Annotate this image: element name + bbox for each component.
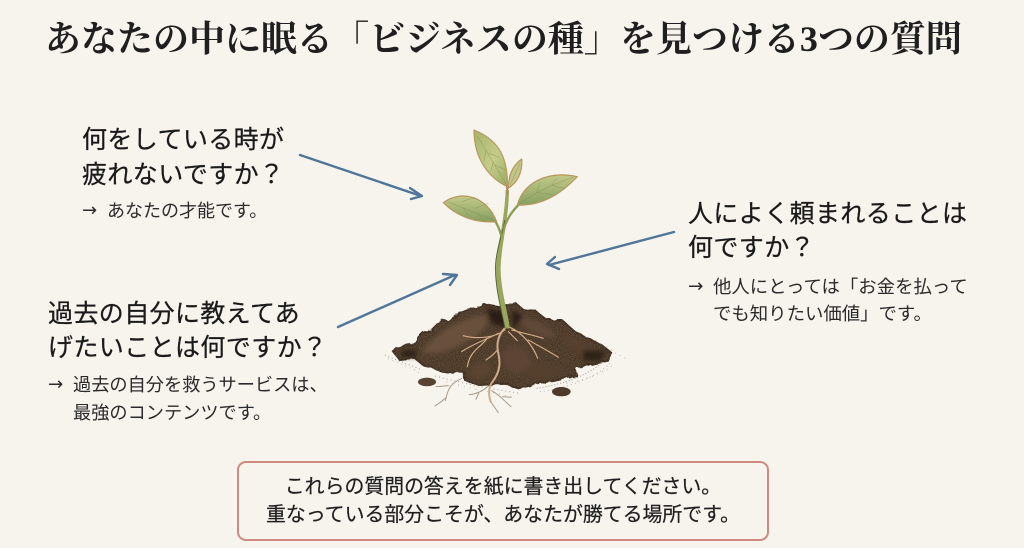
stem	[494, 183, 519, 328]
roots	[435, 327, 558, 413]
question 1 heading: 疲れないですか？	[82, 160, 284, 188]
callout box: これらの質問の答えを紙に書き出してください。	[285, 476, 721, 498]
arrow: right question to plant	[547, 232, 674, 269]
question 3 heading: 何ですか？	[688, 234, 815, 262]
question 3	[688, 200, 968, 324]
question 1 answer: →	[82, 200, 97, 221]
soil mound	[385, 303, 628, 397]
question 3 answer: でも知りたい価値」です。	[713, 303, 932, 324]
callout box: 重なっている部分こそが、あなたが勝てる場所です。	[266, 504, 740, 526]
question 2 heading: げたいことは何ですか？	[48, 334, 327, 362]
question 3 answer: →	[688, 276, 703, 297]
title: あなたの中に眠る「ビジネスの種」を見つける3つの質問	[45, 19, 962, 59]
question 3 answer	[688, 276, 968, 324]
arrow: bottom-left question to plant	[338, 274, 457, 327]
question 3 answer: 他人にとっては「お金を払って	[713, 276, 968, 297]
arrow: top-left question to plant	[300, 155, 422, 199]
question 2 answer: →	[48, 374, 63, 395]
leaves	[443, 130, 577, 222]
question 2	[48, 300, 328, 423]
question 1 heading	[82, 126, 284, 188]
question 1 answer: あなたの才能です。	[107, 201, 267, 221]
question 1	[82, 126, 284, 221]
question 3 heading: 人によく頼まれることは	[688, 200, 967, 228]
question 2 answer: 過去の自分を救うサービスは、	[73, 375, 328, 395]
question 2 answer	[48, 374, 328, 423]
question 2 heading: 過去の自分に教えてあ	[48, 300, 300, 328]
question 2 heading	[48, 300, 327, 362]
question 1 heading: 何をしている時が	[82, 126, 284, 154]
question 2 answer: 最強のコンテンツです。	[73, 403, 271, 423]
question 3 heading	[688, 200, 967, 262]
callout box	[237, 461, 769, 541]
